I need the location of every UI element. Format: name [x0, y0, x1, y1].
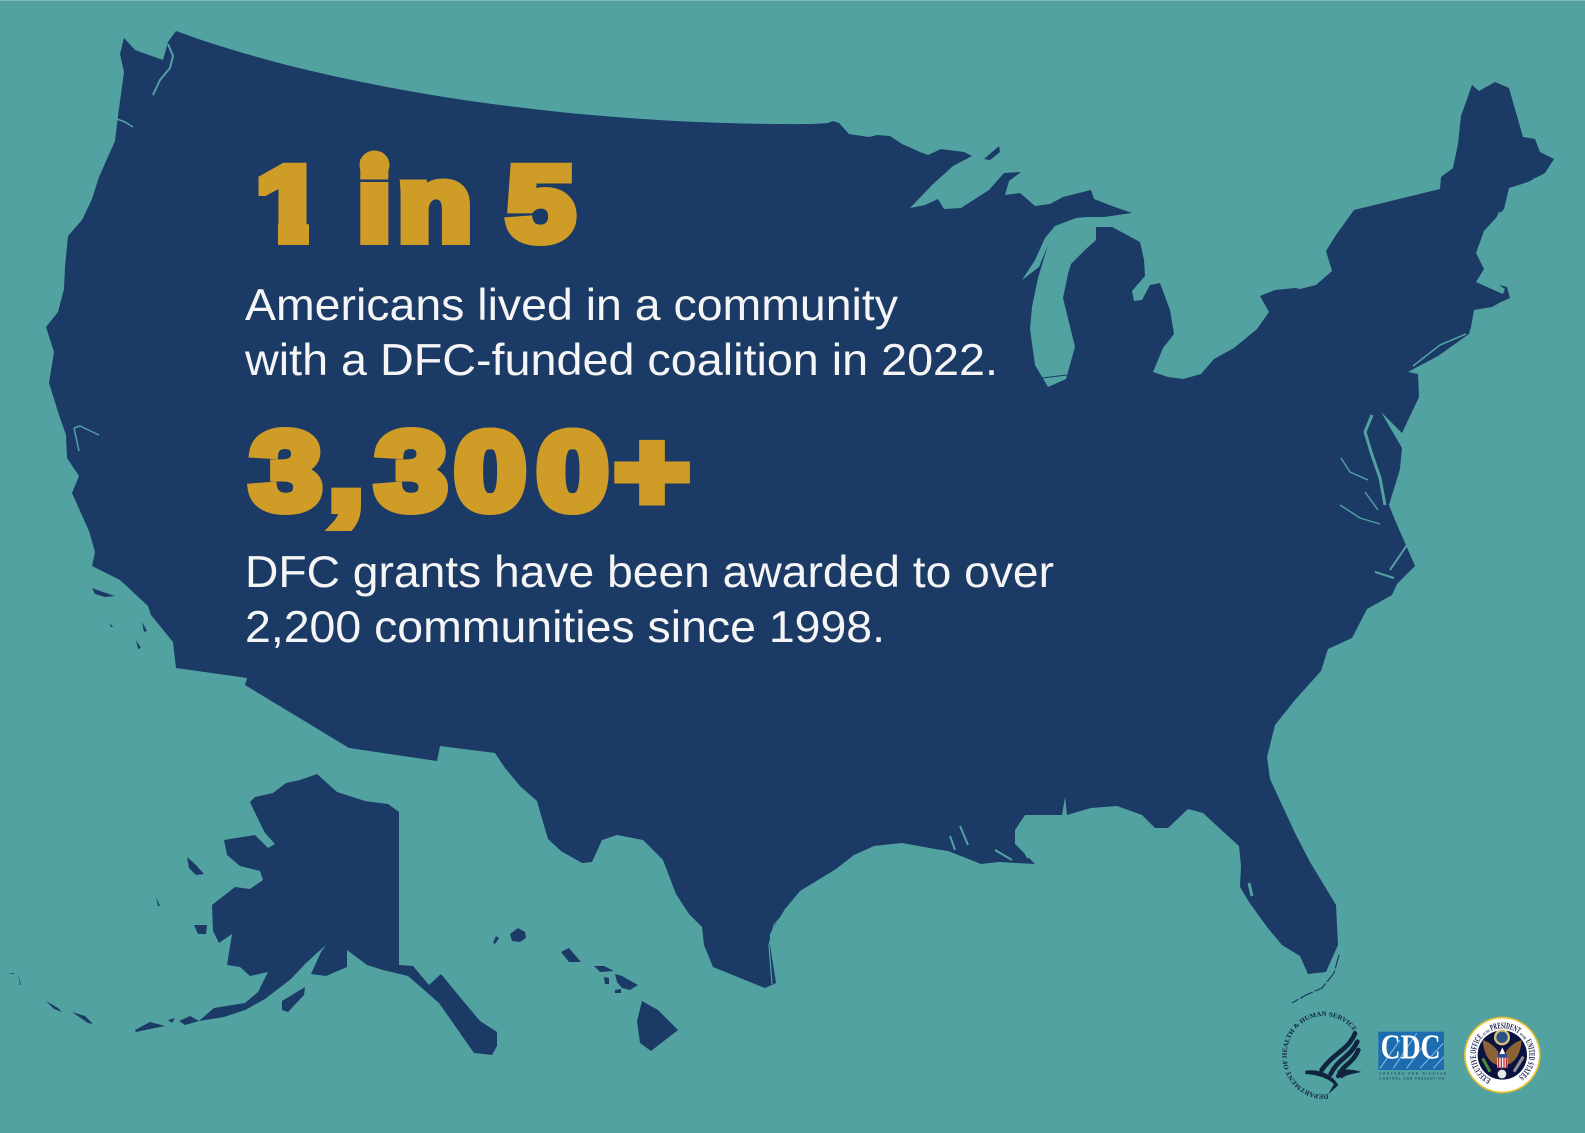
map: Alaska	[199, 774, 497, 1055]
logo: HHS	[1282, 1012, 1361, 1099]
inlet: Maine coast	[1494, 178, 1535, 226]
logos	[1282, 1012, 1541, 1099]
stat: 3,300+: 3,300+	[251, 410, 689, 533]
text: first statement: Americans lived in a community	[245, 281, 899, 330]
inlet: Louisiana bays	[950, 826, 1028, 860]
map: Florida Keys	[1292, 955, 1339, 1003]
logo: CDC: CENTERS FOR DISEASE	[1379, 1071, 1446, 1075]
inlet: Texas coast lagoon	[769, 895, 800, 984]
map: Channel Islands	[92, 588, 147, 649]
inlet: Columbia River	[117, 119, 133, 127]
text: first statement: with a DFC-funded coalition in 2022.	[244, 336, 998, 385]
inlet: Chesapeake Bay	[1365, 415, 1385, 505]
logo: CDC	[1378, 1028, 1446, 1080]
map: Isle Royale	[984, 146, 1000, 160]
inlet: Puget Sound	[153, 44, 173, 95]
stat: 1 in 5: 1 in 5	[256, 145, 574, 262]
logo: Executive Office of the President seal: EXECUTIVE OFFICE OF THE PRESIDENT OF THE UNITED STATES	[1470, 1022, 1535, 1084]
inlet: Long Island Sound	[1413, 334, 1466, 366]
text: second statement: DFC grants have been awarded to over	[245, 548, 1054, 597]
map: water inlets	[74, 44, 1535, 984]
inlet: San Francisco Bay	[74, 426, 99, 451]
text: second statement: 2,200 communities since 1998.	[245, 603, 885, 652]
logo: CDC: CONTROL AND PREVENTION	[1379, 1076, 1444, 1080]
map: Hawaii	[493, 928, 678, 1051]
inlet: Pamlico Sound	[1375, 535, 1412, 578]
inlet: Potomac River	[1340, 458, 1380, 524]
map: Lake Michigan boundary line	[1042, 375, 1067, 378]
logo: CDC: CDC	[1381, 1028, 1441, 1067]
inlet: Tampa Bay	[1249, 883, 1252, 896]
logo: HHS: DEPARTMENT OF HEALTH & HUMAN SERVICES-USA	[1282, 1012, 1357, 1099]
map: Alaskan islands	[8, 857, 305, 1032]
